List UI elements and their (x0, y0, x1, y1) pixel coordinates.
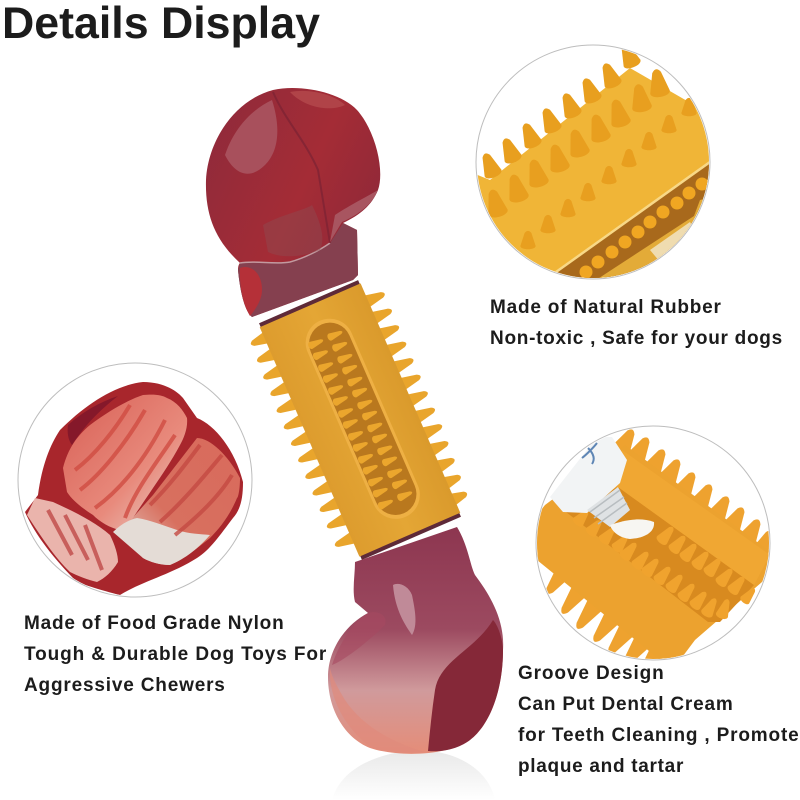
top nylon knob (206, 88, 380, 317)
text: food grade nylon: Aggressive Chewers (24, 675, 226, 696)
floor reflection (332, 750, 495, 800)
text: natural rubber: Non-toxic , Safe for your dogs (490, 328, 783, 349)
panel: groove design detail (536, 426, 770, 660)
text: food grade nylon (24, 613, 327, 696)
text: groove design: plaque and tartar (518, 756, 684, 777)
text: food grade nylon: Tough & Durable Dog Toys For (24, 644, 327, 665)
groove with toothpaste tube (537, 429, 769, 659)
text: food grade nylon: Made of Food Grade Nylon (24, 613, 284, 634)
panel: natural rubber detail (476, 44, 710, 280)
rubber surface with spikes (478, 50, 709, 278)
title: Details Display (2, 0, 320, 48)
bottom nylon knob (328, 527, 503, 754)
text: natural rubber (490, 297, 783, 349)
main product: dog chew bone (206, 88, 503, 800)
text: groove design (518, 663, 800, 777)
text: groove design: Can Put Dental Cream (518, 694, 734, 715)
nylon knob closeup (25, 382, 243, 595)
yellow spiked rubber sleeve (242, 273, 478, 567)
text: groove design: for Teeth Cleaning , Promote (518, 725, 800, 746)
text: groove design: Groove Design (518, 663, 665, 684)
panel: food grade nylon detail (18, 363, 252, 597)
text: natural rubber: Made of Natural Rubber (490, 297, 722, 318)
